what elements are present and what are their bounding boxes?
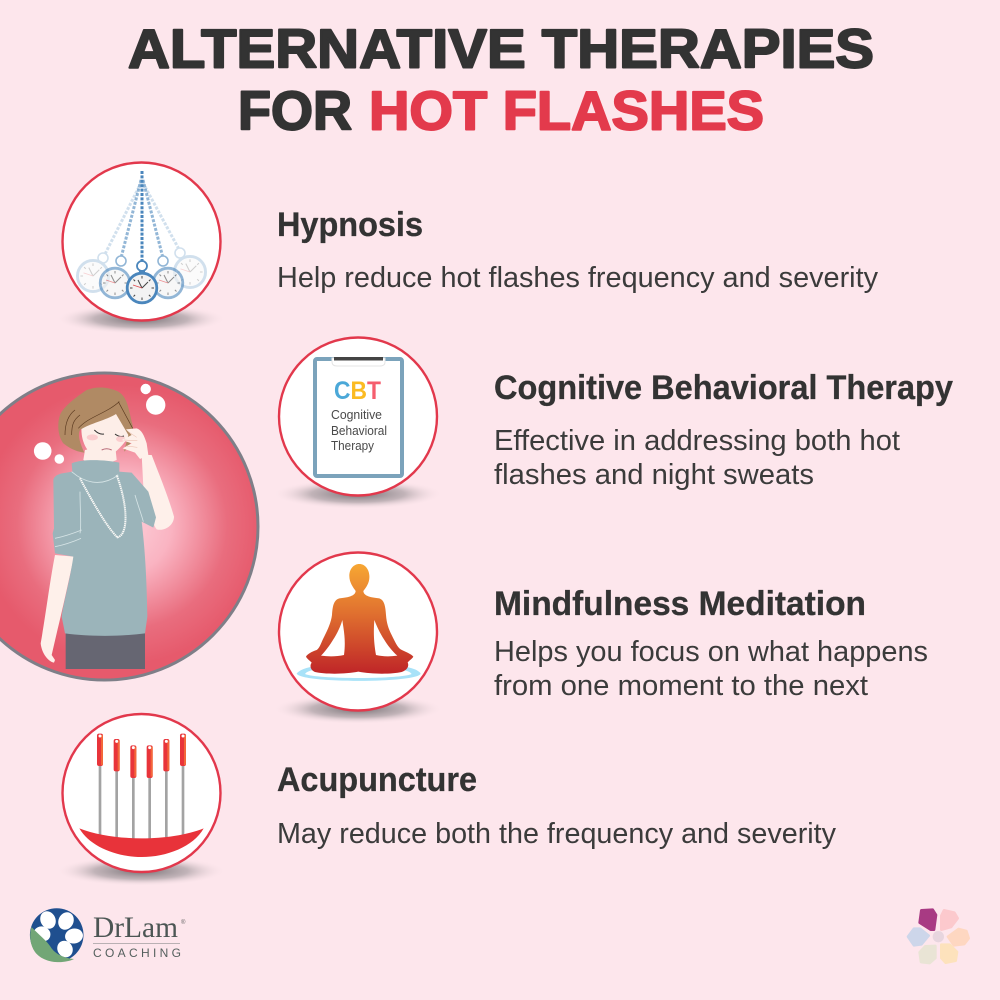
title: FOR <box>238 80 352 142</box>
text: hypnosis: Help reduce hot flashes frequency and severity <box>277 262 878 294</box>
icon: pendulum watches <box>77 171 206 303</box>
icon: clipboard: Therapy <box>331 439 375 453</box>
circle <box>279 552 437 710</box>
circle <box>62 162 220 320</box>
shadow <box>56 304 226 334</box>
logo: DrLam Coaching: ® <box>181 919 186 926</box>
icon: logo flower <box>30 908 84 962</box>
heading: cbt: Cognitive Behavioral Therapy <box>494 369 953 407</box>
icon: clipboard: Behavioral <box>331 424 387 438</box>
text: mindfulness: from one moment to the next <box>494 670 868 702</box>
circle <box>279 338 437 496</box>
circle <box>62 714 220 872</box>
shadow <box>273 694 443 724</box>
heading: mindfulness: Mindfulness Meditation <box>494 585 866 623</box>
logo: DrLam Coaching <box>30 908 186 962</box>
icon: meditation figure <box>297 564 421 681</box>
heading: acupuncture: Acupuncture <box>277 761 477 799</box>
heading: hypnosis: Hypnosis <box>277 206 423 244</box>
text: mindfulness: Helps you focus on what happens <box>494 636 928 668</box>
icon: clipboard <box>315 357 402 476</box>
illustration circle <box>0 373 258 680</box>
panel: acupuncture <box>56 714 226 886</box>
shadow <box>56 856 226 886</box>
text: cbt <box>494 425 900 491</box>
woman figure <box>41 387 174 669</box>
panel: hypnosis <box>56 162 226 334</box>
panel: woman with hot flash <box>0 373 258 680</box>
icon: clipboard: CBT <box>334 377 381 405</box>
shadow <box>273 479 443 509</box>
text: mindfulness <box>494 636 928 702</box>
text: cbt: flashes and night sweats <box>494 459 814 491</box>
text: acupuncture: May reduce both the frequency and severity <box>277 818 836 850</box>
icon: needles <box>79 734 204 857</box>
icon: clipboard: Cognitive <box>331 408 382 422</box>
panel: mindfulness <box>273 552 443 724</box>
steam puffs <box>34 384 165 464</box>
title: HOT FLASHES <box>369 80 764 142</box>
text: cbt: Effective in addressing both hot <box>494 425 900 457</box>
logo: DrLam Coaching: COACHING <box>93 946 181 960</box>
panel: cbt <box>273 338 443 509</box>
title <box>128 18 874 142</box>
icon: flower watermark <box>908 910 969 963</box>
title: ALTERNATIVE THERAPIES <box>128 18 874 80</box>
logo wordmark: DrLam <box>93 911 178 944</box>
